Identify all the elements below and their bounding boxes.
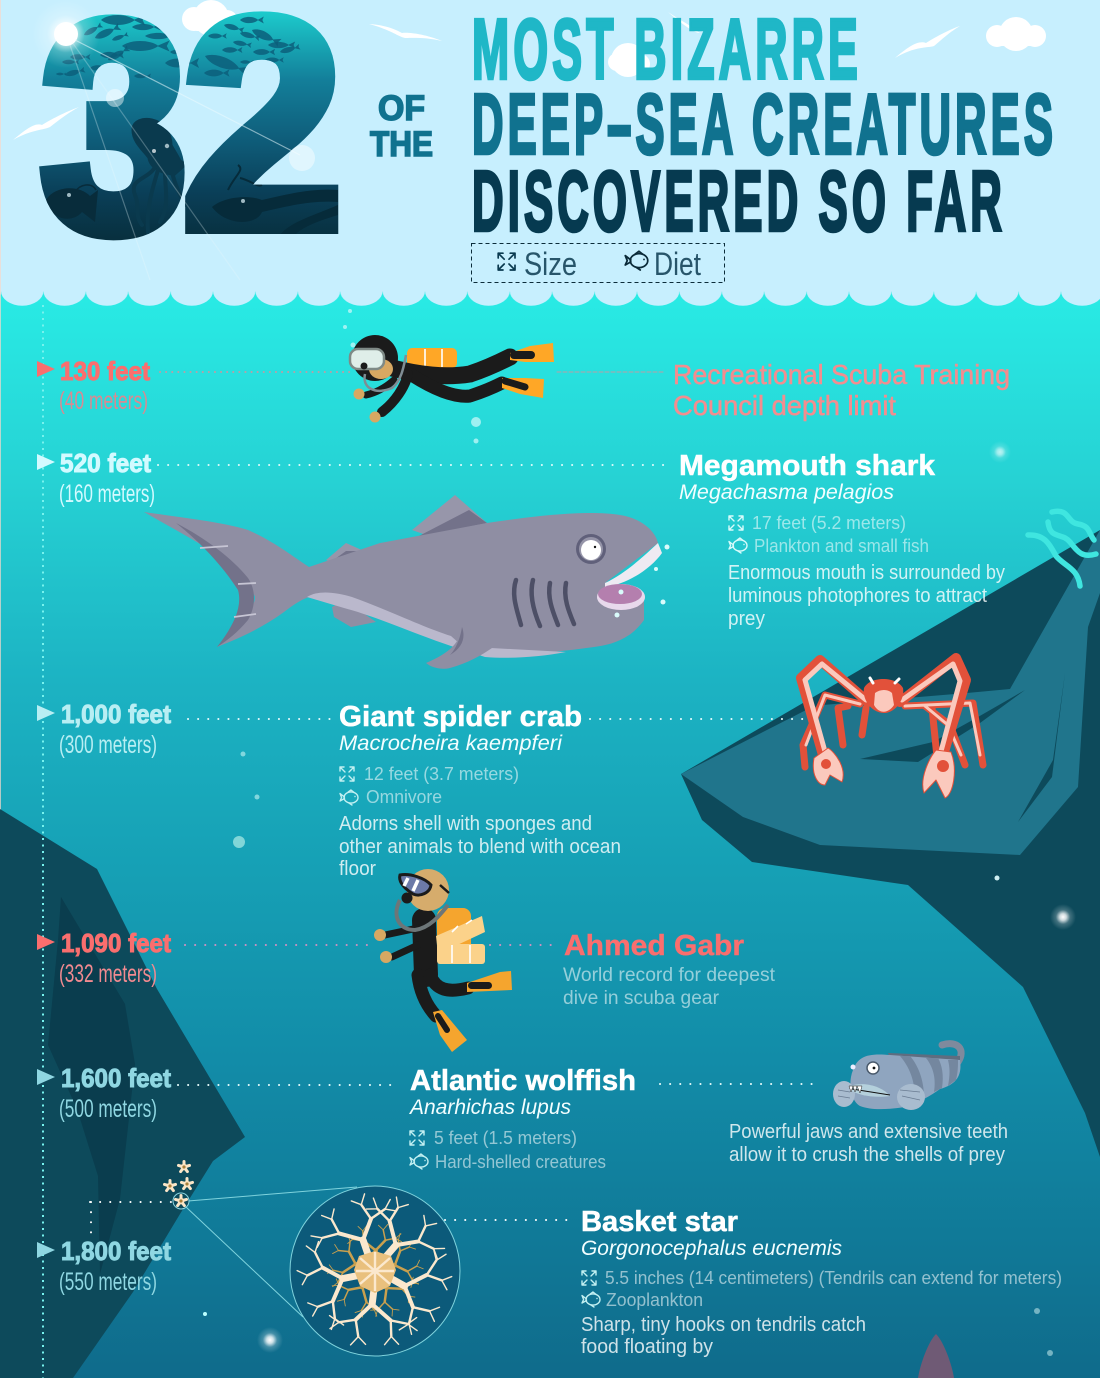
icon: diet <box>625 251 648 270</box>
text: atlantic wolffish: allow it to crush the shells of prey <box>729 1144 1005 1166</box>
callout: scuba training limit <box>673 359 1010 421</box>
magnified circle <box>290 1186 460 1356</box>
depth axis line <box>42 305 44 1378</box>
title <box>472 2 1057 250</box>
text: megamouth shark <box>679 450 1005 630</box>
text: megamouth shark: 17 feet (5.2 meters) <box>752 512 906 533</box>
zoom lines <box>186 1187 357 1317</box>
right rock cliff <box>681 530 1100 1157</box>
text: megamouth shark: Megamouth shark <box>679 450 936 482</box>
viper fish silhouette <box>212 165 338 238</box>
callout: scuba training limit: Council depth limit <box>673 390 896 421</box>
text: Ahmed Gabr: Ahmed Gabr <box>564 930 744 962</box>
atlantic wolffish illustration <box>833 1044 961 1110</box>
left rock cliff <box>0 809 245 1378</box>
open mouth <box>597 584 645 610</box>
text: basket star: food floating by <box>581 1336 713 1358</box>
stripes <box>900 1056 958 1100</box>
rear legs <box>803 695 983 767</box>
ocean water background <box>0 291 1100 1378</box>
seagull: top centre <box>369 24 442 41</box>
text: basket star: Gorgonocephalus eucnemis <box>581 1237 842 1260</box>
text: giant spider crab: Giant spider crab <box>339 701 582 733</box>
text: atlantic wolffish: Powerful jaws and extensive teeth <box>729 1121 1008 1143</box>
depth marker: 1,800 feet: 1,800 feet <box>61 1236 171 1266</box>
"of the" heading: OF <box>378 89 425 128</box>
text: Ahmed Gabr: dive in scuba gear <box>563 987 719 1009</box>
seamount tip <box>918 1334 954 1378</box>
photophores <box>614 544 670 618</box>
text: giant spider crab: Adorns shell with sponges and <box>339 813 592 835</box>
ventral fin <box>332 600 376 627</box>
text: basket star: Zooplankton <box>606 1289 703 1310</box>
cloud: behind title <box>608 43 650 77</box>
depth marker: 520 feet <box>37 448 155 508</box>
depth marker: 1,000 feet: 1,000 feet <box>61 699 171 729</box>
depth marker: 1,800 feet: (550 meters) <box>59 1268 157 1296</box>
megamouth shark illustration <box>144 495 670 669</box>
legend: Size <box>524 246 577 282</box>
gills <box>514 580 574 626</box>
scuba diver: Ahmed Gabr <box>374 869 512 1052</box>
small basket stars <box>178 1162 190 1172</box>
fish school <box>56 14 300 78</box>
"of the" heading: THE <box>370 125 433 164</box>
fins <box>510 343 554 362</box>
depth marker: 520 feet: 520 feet <box>60 448 151 478</box>
pectoral fins <box>833 1081 855 1107</box>
text: basket star: Basket star <box>581 1206 738 1238</box>
depth marker: 1,800 feet <box>37 1236 171 1296</box>
cream arms <box>289 1184 458 1347</box>
depth marker: 1,600 feet: (500 meters) <box>59 1095 157 1123</box>
water squiggles <box>1028 511 1096 586</box>
text: basket star <box>581 1206 1062 1358</box>
mask <box>350 349 384 369</box>
body <box>850 1054 960 1109</box>
text: megamouth shark: Enormous mouth is surrounded by <box>728 562 1005 584</box>
cloud: behind numeral <box>182 0 238 36</box>
depth marker: 130 feet <box>37 356 150 415</box>
giant spider crab illustration <box>801 658 983 798</box>
seagull: behind title <box>668 12 700 33</box>
depth marker: 130 feet: 130 feet <box>60 356 150 386</box>
upper jaw <box>605 543 662 587</box>
sky background <box>0 0 1100 310</box>
text: giant spider crab: other animals to blend with ocean <box>339 836 621 858</box>
body <box>144 512 658 655</box>
text: megamouth shark: prey <box>728 608 765 630</box>
depth marker: 130 feet: (40 meters) <box>59 387 148 415</box>
text: Ahmed Gabr <box>563 930 776 1009</box>
text: basket star: 5.5 inches (14 centimeters) (Tendrils can extend for meters) <box>605 1267 1062 1288</box>
text: atlantic wolffish <box>408 1065 1008 1172</box>
eye <box>576 534 606 564</box>
eye <box>867 1062 879 1074</box>
text: atlantic wolffish: 5 feet (1.5 meters) <box>434 1127 577 1148</box>
text: atlantic wolffish: Hard-shelled creatures <box>435 1151 606 1172</box>
scuba diver: recreational <box>350 335 554 422</box>
depth marker: 520 feet: (160 meters) <box>59 480 155 508</box>
sun and light rays <box>32 0 315 280</box>
legend <box>472 244 724 282</box>
belly strip <box>307 592 566 658</box>
depth marker: 1,090 feet <box>37 928 171 988</box>
mask <box>440 885 449 893</box>
gold inner arms <box>325 1223 429 1325</box>
depth marker: 1,600 feet: 1,600 feet <box>61 1063 171 1093</box>
clouds and seagulls <box>13 0 1046 140</box>
cloud: top right <box>986 17 1046 51</box>
tank bands <box>436 916 485 954</box>
depth marker: 1,600 feet <box>37 1063 171 1123</box>
suit body and limbs <box>366 357 510 412</box>
basket star illustration <box>164 1162 460 1356</box>
suit <box>385 920 468 1016</box>
text: giant spider crab: Omnivore <box>366 786 442 807</box>
octopus silhouette <box>132 118 192 232</box>
text: giant spider crab: Macrocheira kaempferi <box>339 732 563 755</box>
depth marker: 1,000 feet <box>37 699 171 759</box>
wave scallops <box>0 291 1100 307</box>
depth marker: 1,090 feet: 1,090 feet <box>61 928 171 958</box>
front legs and claws <box>801 658 966 755</box>
text: megamouth shark: Plankton and small fish <box>754 535 929 556</box>
text: giant spider crab <box>339 701 621 880</box>
text: megamouth shark: Megachasma pelagios <box>679 481 895 504</box>
callout: scuba training limit: Recreational Scuba Training <box>673 359 1010 390</box>
depth marker: 1,000 feet: (300 meters) <box>59 731 157 759</box>
tail curl <box>942 1044 961 1062</box>
fins <box>467 971 512 992</box>
oxygen tank <box>407 348 457 368</box>
hands <box>354 388 364 400</box>
text: atlantic wolffish: Anarhichas lupus <box>408 1096 571 1119</box>
depth marker: 1,090 feet: (332 meters) <box>59 960 157 988</box>
text: giant spider crab: floor <box>339 858 376 880</box>
text: megamouth shark: luminous photophores to attract <box>728 585 987 607</box>
text: giant spider crab: 12 feet (3.7 meters) <box>364 763 519 784</box>
seagull: left <box>13 107 79 140</box>
tail shading <box>176 523 254 647</box>
pectoral fin <box>426 627 492 669</box>
mouth <box>850 1084 890 1097</box>
anglerfish silhouette <box>46 185 98 222</box>
icon: size <box>498 253 515 270</box>
hose <box>396 900 448 930</box>
text: Ahmed Gabr: World record for deepest <box>563 964 776 986</box>
seagull: right <box>895 26 960 58</box>
dorsal fins <box>412 495 487 540</box>
bubbles and glowing particles <box>203 309 1076 1356</box>
hose <box>365 355 406 391</box>
depth leader lines <box>90 372 812 1235</box>
carapace <box>864 679 903 713</box>
tank <box>437 908 471 962</box>
central disc <box>354 1251 396 1293</box>
hands <box>374 929 386 941</box>
text: atlantic wolffish: Atlantic wolffish <box>410 1065 636 1097</box>
"of the" heading <box>370 89 433 164</box>
teeth <box>849 1086 862 1093</box>
big numeral 32 <box>39 11 338 240</box>
text: basket star: Sharp, tiny hooks on tendrils catch <box>581 1314 866 1336</box>
eyes <box>870 678 899 683</box>
dorsal fin <box>888 1053 960 1064</box>
head <box>407 869 449 911</box>
legend: Diet <box>654 246 701 282</box>
light bubble <box>106 89 124 107</box>
